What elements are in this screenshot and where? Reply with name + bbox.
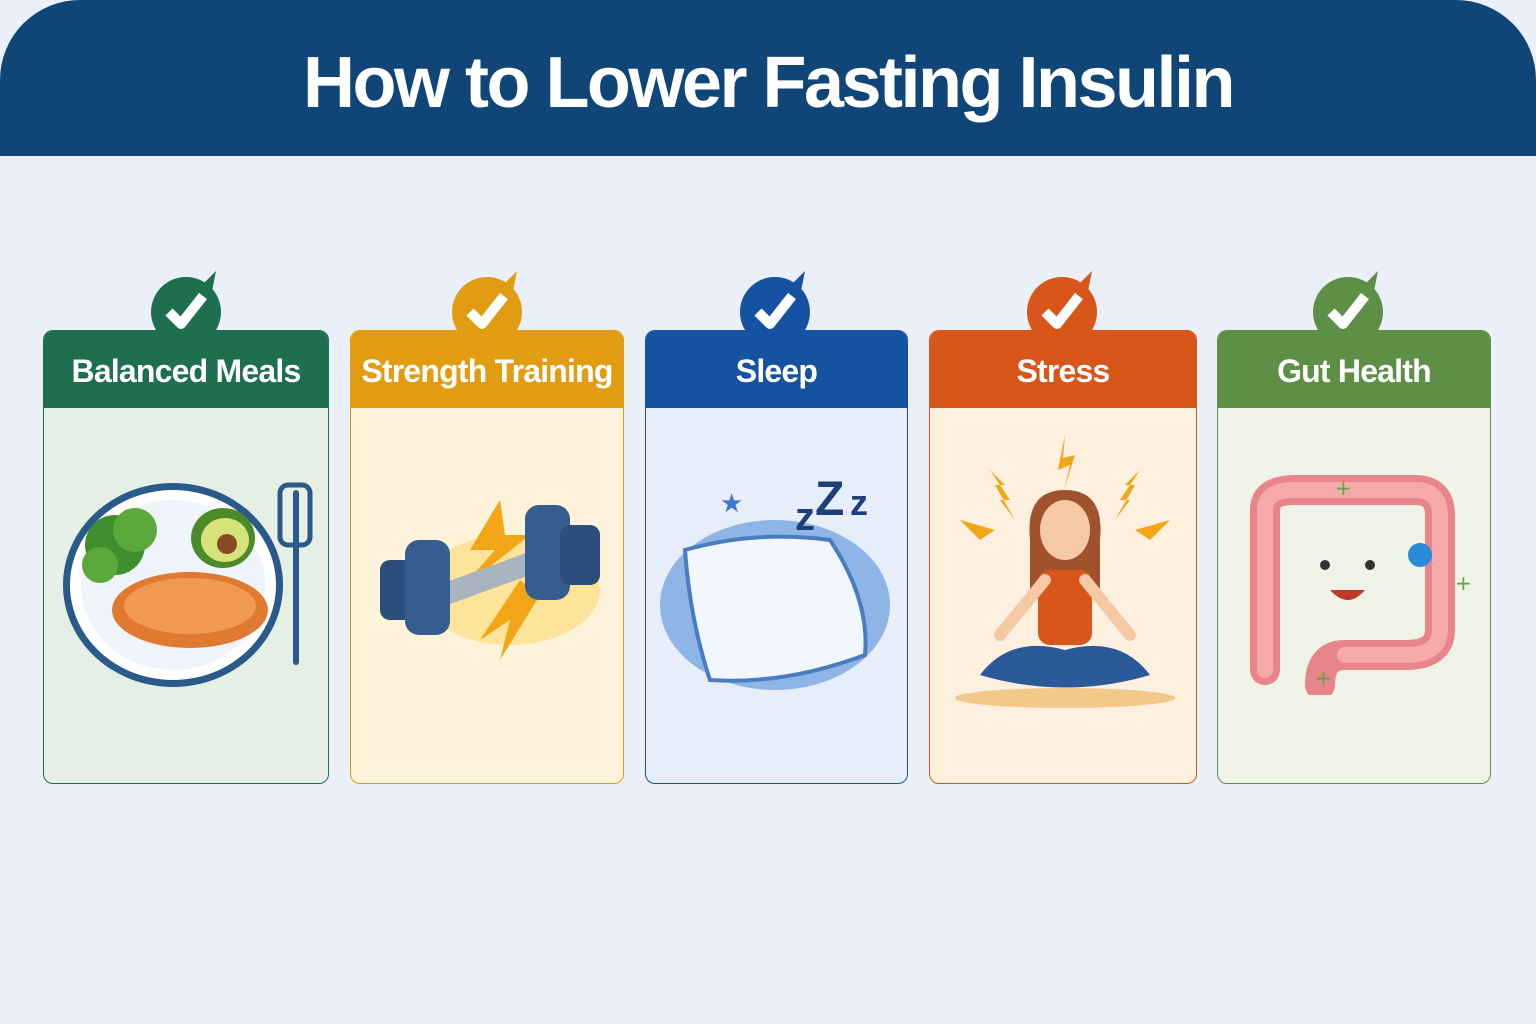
icon: intestine: + bbox=[1455, 571, 1472, 595]
panel: gut health bbox=[1217, 330, 1491, 784]
icon: pillow bbox=[660, 473, 890, 690]
icon: pillow: z bbox=[795, 495, 815, 539]
icon: intestine: + bbox=[1315, 666, 1332, 690]
panel: strength training: Strength Training bbox=[361, 353, 613, 389]
icon: meditating woman bbox=[955, 435, 1175, 708]
panel: sleep bbox=[645, 330, 908, 784]
icon: check red bbox=[1027, 271, 1097, 330]
panel: stress bbox=[929, 330, 1197, 784]
panel: gut health: Gut Health bbox=[1277, 353, 1431, 389]
icon: check green2 bbox=[1313, 271, 1383, 330]
panel: sleep: Sleep bbox=[736, 353, 817, 389]
icon: intestine bbox=[1250, 475, 1472, 695]
icon: plate bbox=[63, 482, 312, 687]
title bbox=[0, 0, 1536, 156]
panel: balanced meals bbox=[43, 330, 329, 784]
icon: pillow: Z bbox=[815, 473, 844, 526]
title: How to Lower Fasting Insulin bbox=[303, 43, 1233, 123]
icon: check orange bbox=[452, 271, 522, 330]
icon: check blue bbox=[740, 271, 810, 330]
icon: dumbbell bbox=[380, 500, 600, 660]
icon: intestine: + bbox=[1335, 476, 1352, 500]
panel: strength training bbox=[350, 330, 624, 784]
icon: check green bbox=[151, 271, 221, 330]
icon: pillow: ★ bbox=[720, 489, 743, 519]
icon: pillow: z bbox=[850, 482, 868, 523]
panel: stress: Stress bbox=[1016, 353, 1110, 389]
panel: balanced meals: Balanced Meals bbox=[72, 353, 300, 389]
